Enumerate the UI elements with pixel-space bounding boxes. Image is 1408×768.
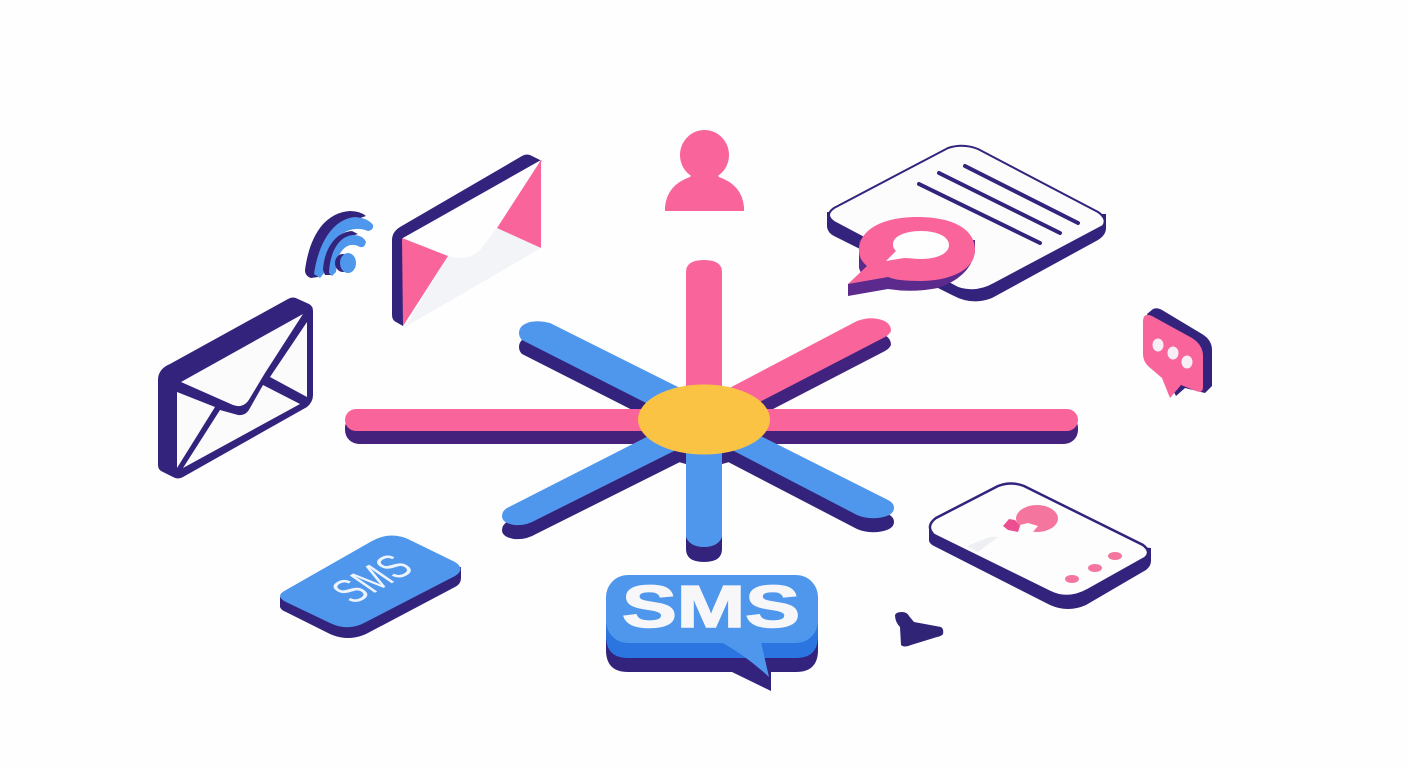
icon: wifi (305, 211, 373, 278)
label: SMS bubble text: SMS (622, 574, 800, 640)
spoke: lower left blue (502, 422, 702, 539)
hub: dark underside (654, 406, 754, 466)
spoke: upper left blue (519, 321, 690, 421)
spoke: top pink (686, 260, 722, 400)
icon: small dark arrow shape (895, 612, 943, 646)
speech bubble (848, 217, 975, 296)
label: SMS tile text: SMS (321, 547, 424, 611)
icon: person (665, 130, 744, 211)
icon: pink envelope (392, 154, 542, 327)
spoke: bottom blue (686, 440, 722, 562)
icon: document with speech bubble (827, 146, 1106, 301)
icon: small chat bubble (1143, 308, 1212, 398)
icon: outlined envelope (158, 298, 313, 478)
spoke: lower right blue (707, 422, 894, 532)
spoke: horizontal pink (345, 409, 1078, 444)
callout: large SMS bubble (606, 574, 818, 691)
icon: phone card (929, 484, 1151, 609)
hub: yellow centre (638, 384, 770, 454)
spoke: upper right pink (720, 318, 891, 421)
card: small SMS tile (280, 536, 461, 638)
hub and spokes (345, 260, 1078, 562)
document lines (919, 166, 1078, 243)
document sheet (827, 146, 1106, 301)
